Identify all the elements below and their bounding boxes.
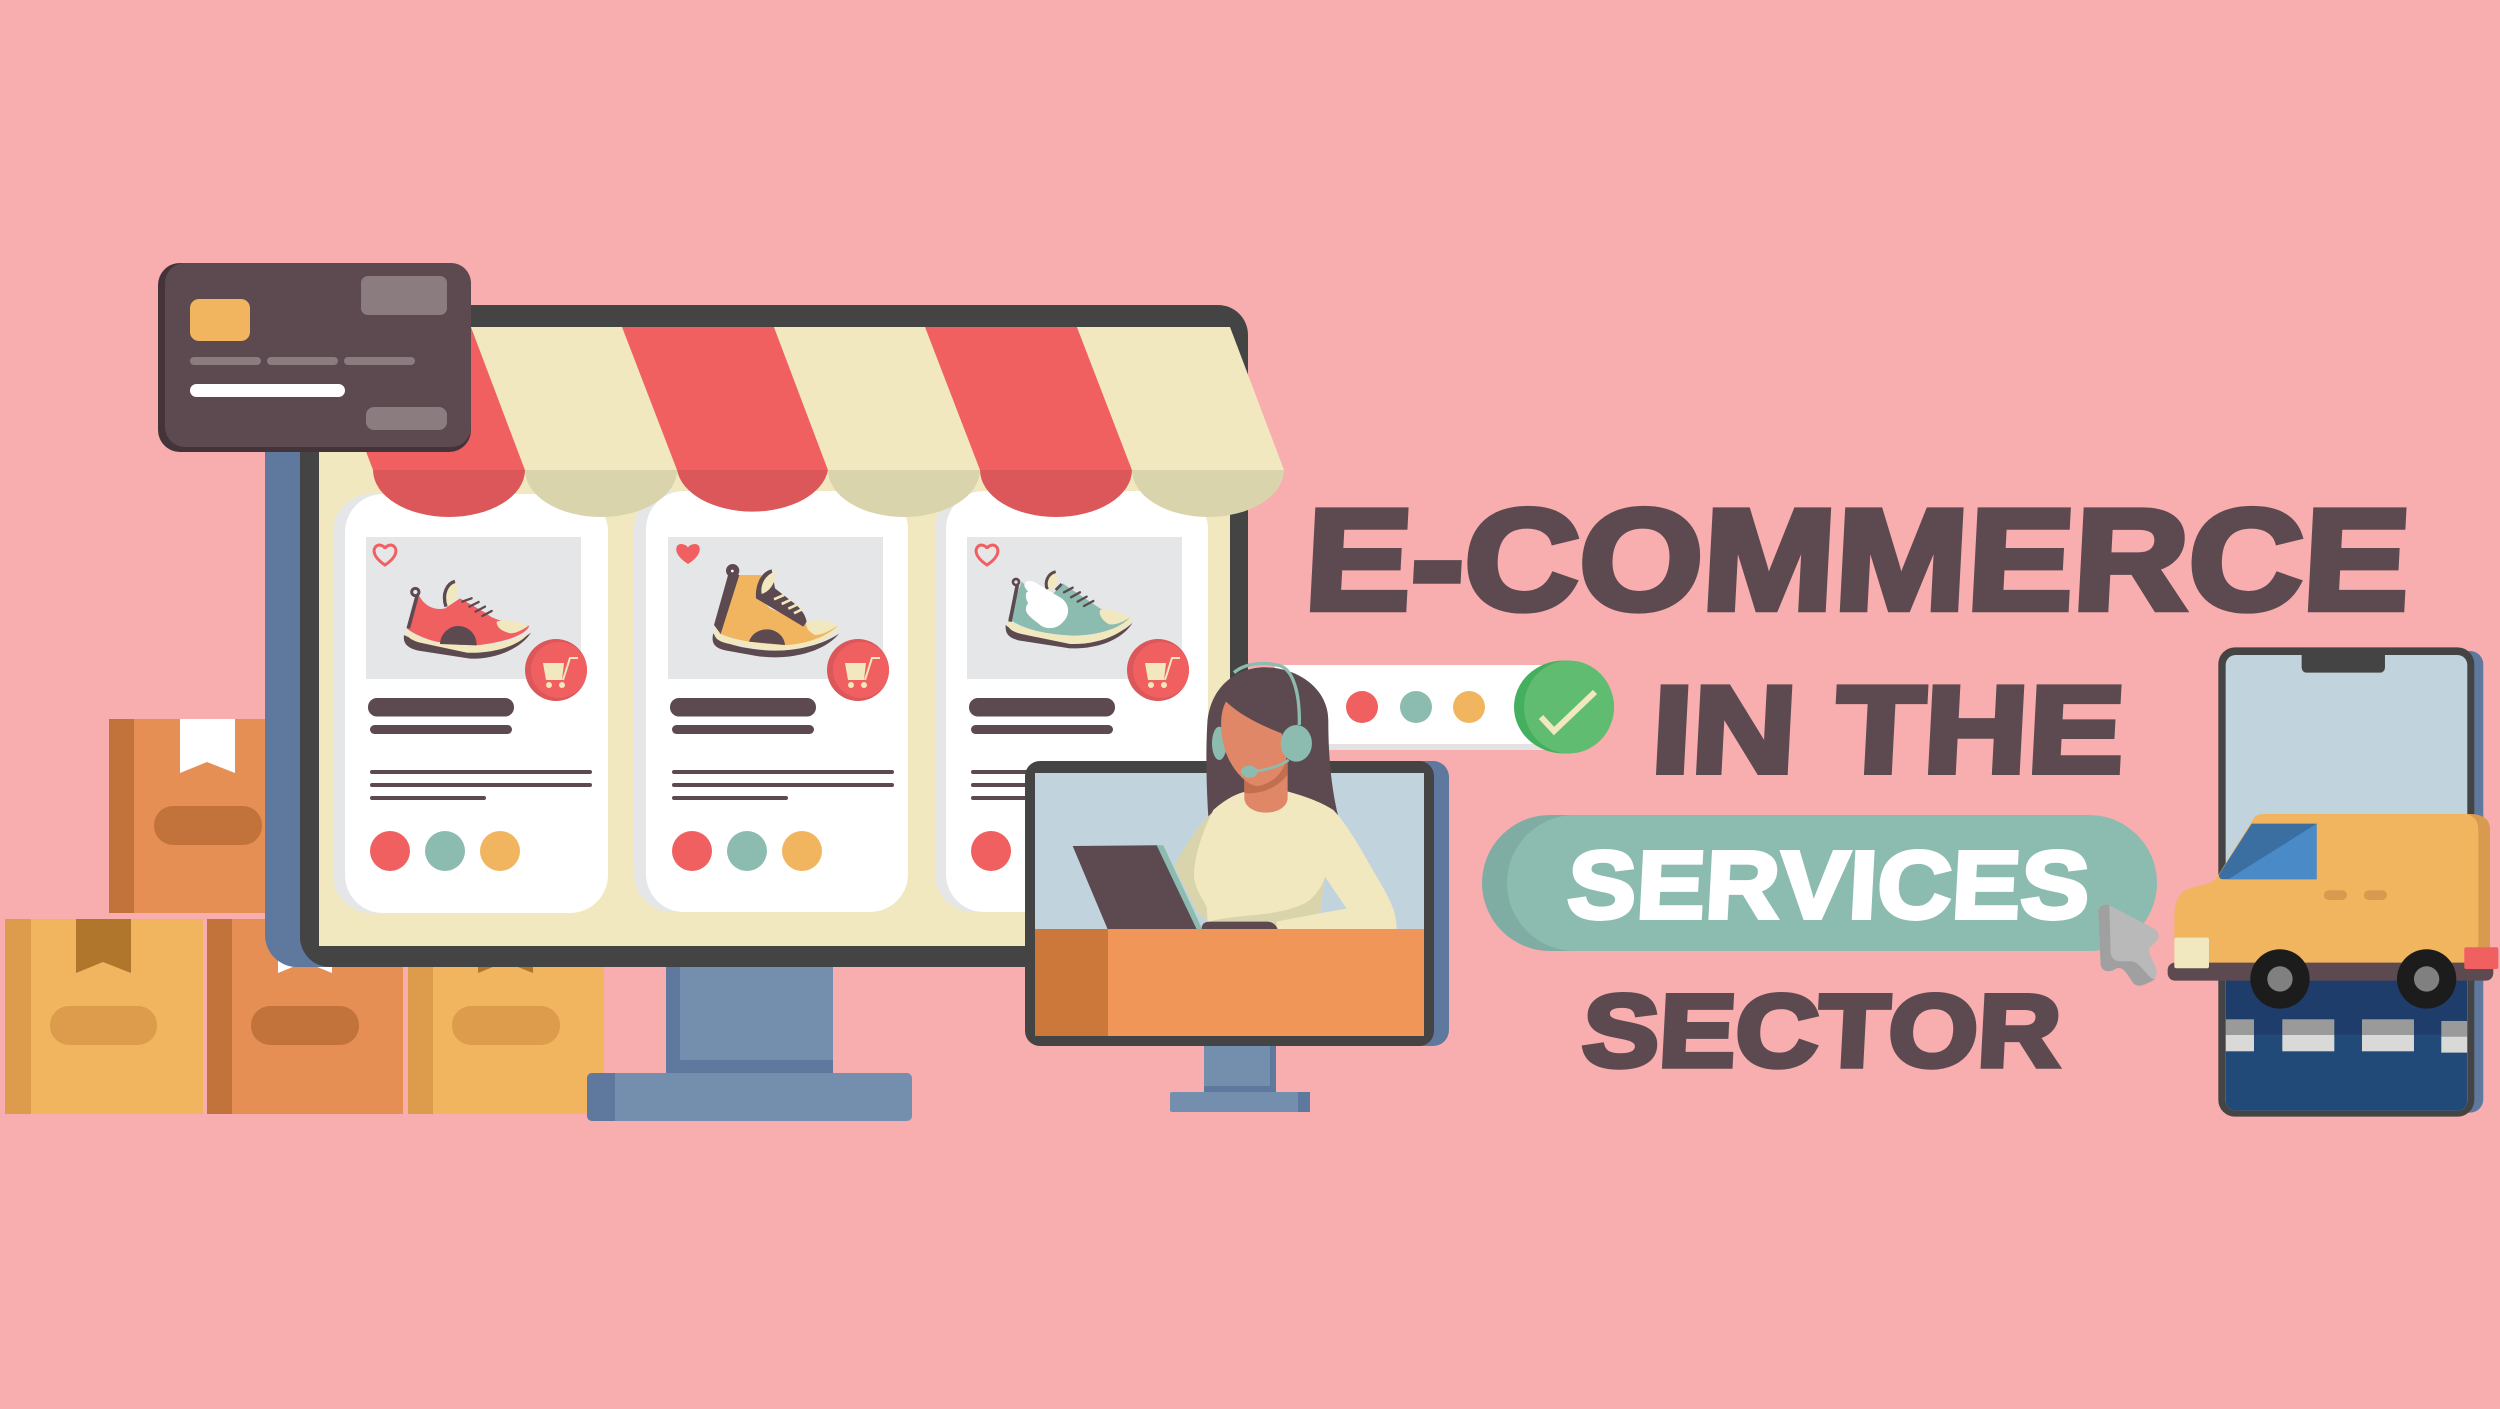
box: front middle orange (207, 919, 403, 1114)
box: front right yellow (408, 919, 604, 1114)
small monitor stand (1170, 1046, 1310, 1112)
small monitor frame (1025, 761, 1449, 1046)
icon: heart filled (676, 544, 700, 564)
notification pill with dots and check (1275, 660, 1614, 754)
icon: red sneaker (404, 581, 531, 659)
colour swatches (370, 831, 520, 871)
colour swatches (672, 831, 822, 871)
desk (1035, 929, 1424, 1036)
product card 2: yellow boot (634, 491, 908, 912)
box: front left yellow (5, 919, 203, 1114)
small monitor with support agent (1025, 664, 1449, 1112)
icon: heart outline (374, 545, 396, 565)
icon: cart button (827, 639, 889, 701)
road (2226, 977, 2467, 1112)
services pill (1482, 815, 2157, 951)
icon: green check badge (1514, 660, 1614, 754)
icon: cart button (1127, 639, 1189, 701)
laptop (1073, 845, 1278, 929)
icon: teal sneaker (1006, 572, 1133, 648)
support agent figure (1073, 664, 1397, 929)
title line: E-COMMERCE: E-COMMERCE (1301, 480, 2414, 640)
icon: cart button (525, 639, 587, 701)
product text bars (368, 698, 592, 800)
main monitor stand (587, 960, 912, 1121)
product card 3: teal winged shoe (935, 491, 1208, 912)
icon: heart outline (976, 545, 998, 565)
credit card (158, 263, 471, 452)
title line: IN THE: IN THE (1649, 662, 2128, 799)
product text bars (969, 698, 1193, 800)
smartphone with road and delivery van (2168, 647, 2498, 1117)
title line: SERVICES: SERVICES (1565, 832, 2093, 939)
title line: SECTOR: SECTOR (1580, 974, 2064, 1088)
product text bars (670, 698, 894, 800)
colour swatch (971, 831, 1011, 871)
icon: mouse cursor (2098, 905, 2159, 986)
striped shop awning (319, 327, 1284, 517)
icon: yellow sneaker (713, 564, 839, 657)
phone body (2218, 647, 2483, 1117)
icon: stacked cardboard boxes (5, 719, 604, 1114)
product card 1: red shoe (333, 494, 608, 913)
main monitor frame (265, 305, 1248, 967)
box: back orange (109, 719, 306, 913)
title (1301, 480, 2414, 1088)
delivery van (2168, 814, 2498, 1009)
